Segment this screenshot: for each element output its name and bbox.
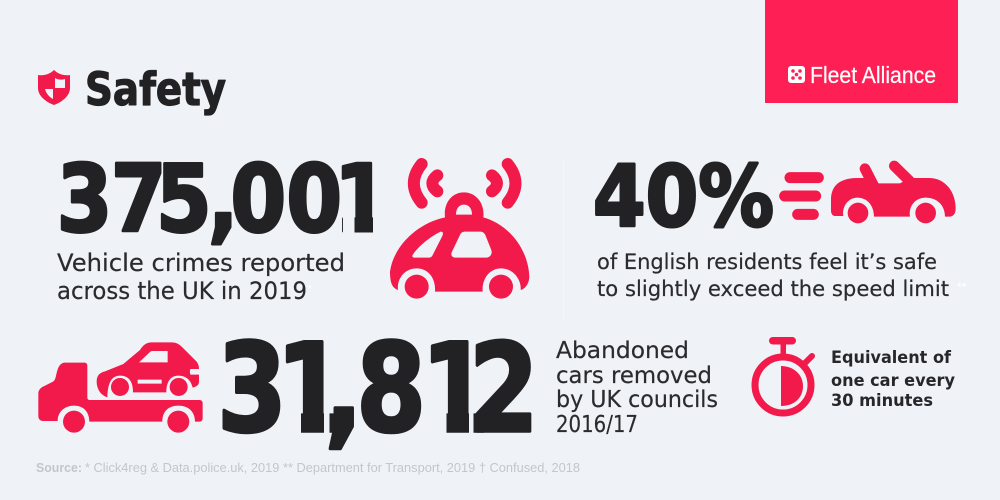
text: equivalent callout: 30 minutes	[831, 391, 933, 410]
icon: tow truck carrying car	[38, 342, 203, 433]
stat: vehicle crimes number: 375,001	[57, 145, 390, 254]
text: abandoned cars description: 2016/17	[556, 412, 638, 438]
text: abandoned cars description: Abandoned	[556, 338, 689, 364]
text: abandoned cars description: by UK councils	[556, 387, 718, 413]
text: speed limit description	[597, 250, 967, 302]
text: speed limit description: to slightly exceed the speed limit	[597, 277, 949, 302]
stat: abandoned cars number: 31,812	[217, 318, 539, 461]
logo panel: Fleet Alliance	[765, 0, 958, 103]
text: vehicle crimes description: across the UK in 2019	[57, 277, 307, 305]
text: vehicle crimes description: *	[308, 284, 312, 295]
icon: shield	[38, 70, 70, 105]
icon: car with alarm signal	[390, 164, 529, 299]
icon: Fleet Alliance logo mark	[788, 66, 805, 83]
text: equivalent callout: one car every	[831, 371, 955, 390]
icon: stopwatch	[755, 337, 812, 413]
text: speed limit description: **	[957, 280, 967, 294]
text: vehicle crimes description: Vehicle crimes reported	[57, 249, 345, 277]
heading: Safety	[85, 63, 226, 116]
source footnote: Source:	[36, 461, 82, 475]
text: speed limit description: of English residents feel it’s safe	[597, 250, 937, 275]
text: abandoned cars description: cars removed	[556, 363, 712, 389]
text: abandoned cars description	[556, 338, 718, 438]
text: vehicle crimes description	[57, 249, 345, 305]
text: equivalent callout: Equivalent of	[831, 348, 952, 367]
logo wordmark: Fleet Alliance	[810, 62, 936, 88]
source footnote: * Click4reg & Data.police.uk, 2019 ** Department for Transport, 2019 † Confused, 2018	[85, 461, 580, 475]
icon: convertible car with speed lines	[785, 166, 956, 223]
stat: speed limit percentage: 40%	[593, 148, 774, 247]
text: equivalent callout	[831, 348, 955, 410]
